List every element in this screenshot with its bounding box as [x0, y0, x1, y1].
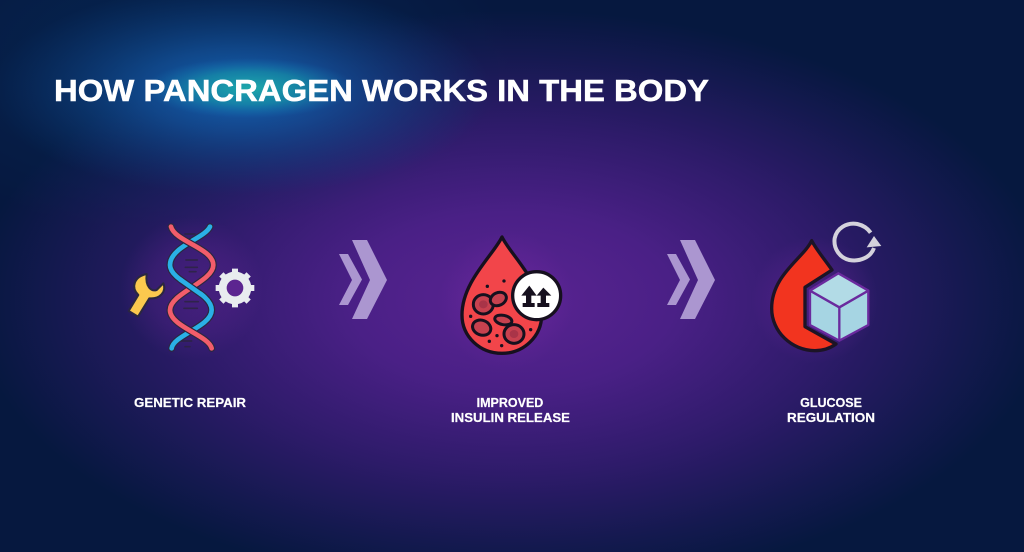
icon: DNA helix with wrench and gear — [120, 217, 263, 360]
icon: wrench — [129, 274, 164, 317]
label: glucose regulation: REGULATION — [787, 411, 875, 425]
icon: gear — [216, 269, 254, 307]
title: HOW PANCRAGEN WORKS IN THE BODY — [54, 74, 709, 108]
arrow 2 — [667, 240, 715, 319]
arrow 1 — [339, 240, 387, 319]
icon: cube — [810, 273, 868, 341]
icon: blood drop — [440, 230, 573, 370]
step 3: glucose regulation — [752, 224, 881, 425]
icon: drop with cube — [752, 224, 881, 363]
label: improved insulin release: IMPROVED — [477, 396, 543, 410]
label: glucose regulation: GLUCOSE — [800, 396, 862, 410]
label: genetic repair: GENETIC REPAIR — [134, 396, 246, 410]
icon: up arrows badge — [513, 272, 561, 320]
label: improved insulin release: INSULIN RELEASE — [451, 411, 570, 425]
icon: cycle arrow — [834, 224, 881, 260]
step 1: genetic repair — [120, 217, 263, 410]
step 2: improved insulin release — [440, 230, 573, 425]
